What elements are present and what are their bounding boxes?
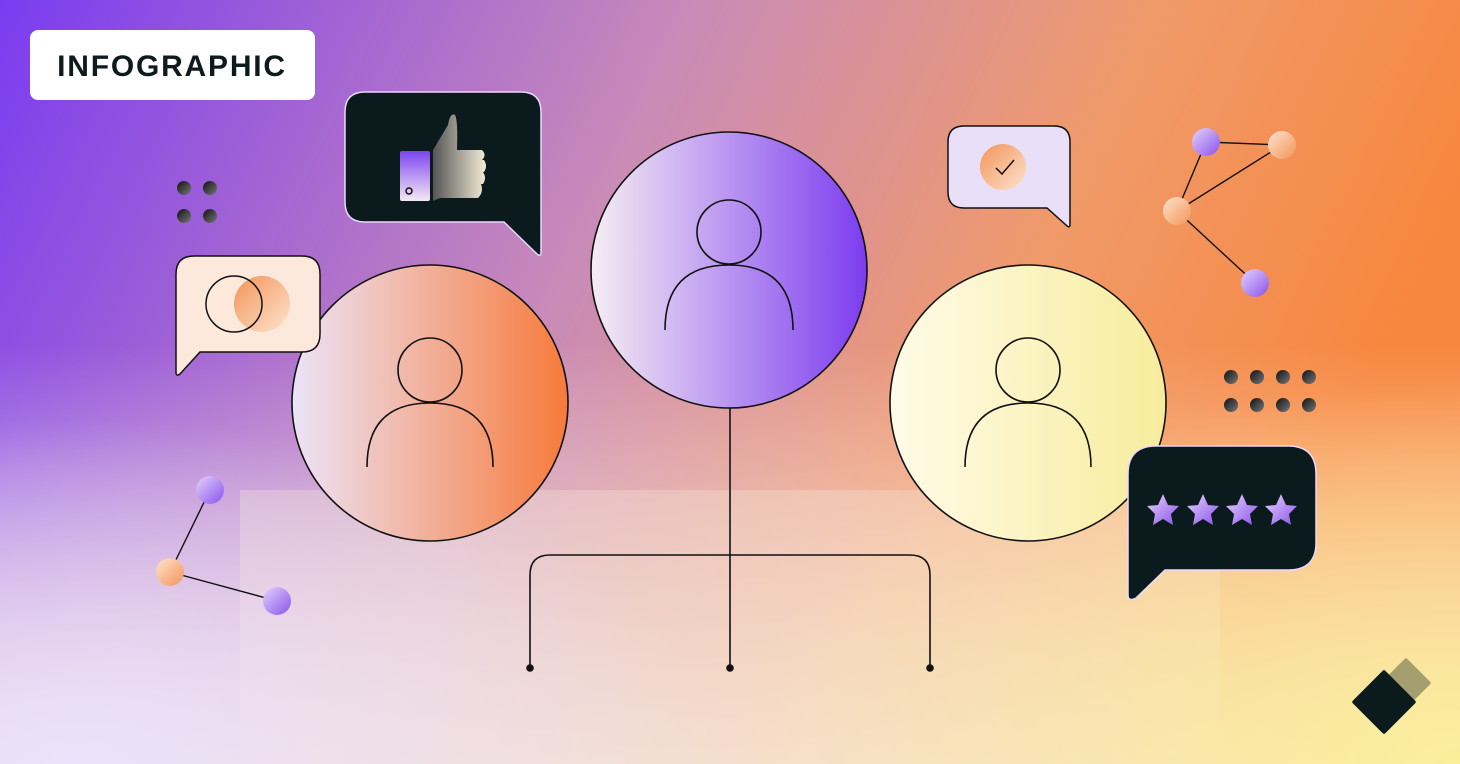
dots grid: top left bbox=[177, 181, 217, 223]
bubble: venn diagram bbox=[176, 256, 320, 375]
person circle: right bbox=[890, 265, 1166, 541]
network: top right bbox=[1163, 128, 1296, 297]
icon: check circle bbox=[980, 144, 1026, 190]
label: INFOGRAPHIC: INFOGRAPHIC bbox=[57, 50, 287, 83]
person circle: left bbox=[292, 265, 568, 541]
bubble: thumbs up bbox=[345, 92, 541, 255]
dots grid: right bbox=[1224, 370, 1316, 412]
connector tree bbox=[527, 408, 933, 671]
icon: thumbs up bbox=[400, 114, 486, 201]
icon: venn bbox=[206, 276, 290, 332]
bubble: check bbox=[948, 126, 1070, 227]
bubble: stars rating bbox=[1128, 446, 1316, 599]
icon: four stars bbox=[1147, 494, 1297, 525]
label: INFOGRAPHIC bbox=[30, 30, 315, 100]
logo bbox=[1351, 658, 1431, 735]
network: bottom left bbox=[156, 476, 291, 615]
person circle: middle bbox=[591, 132, 867, 408]
